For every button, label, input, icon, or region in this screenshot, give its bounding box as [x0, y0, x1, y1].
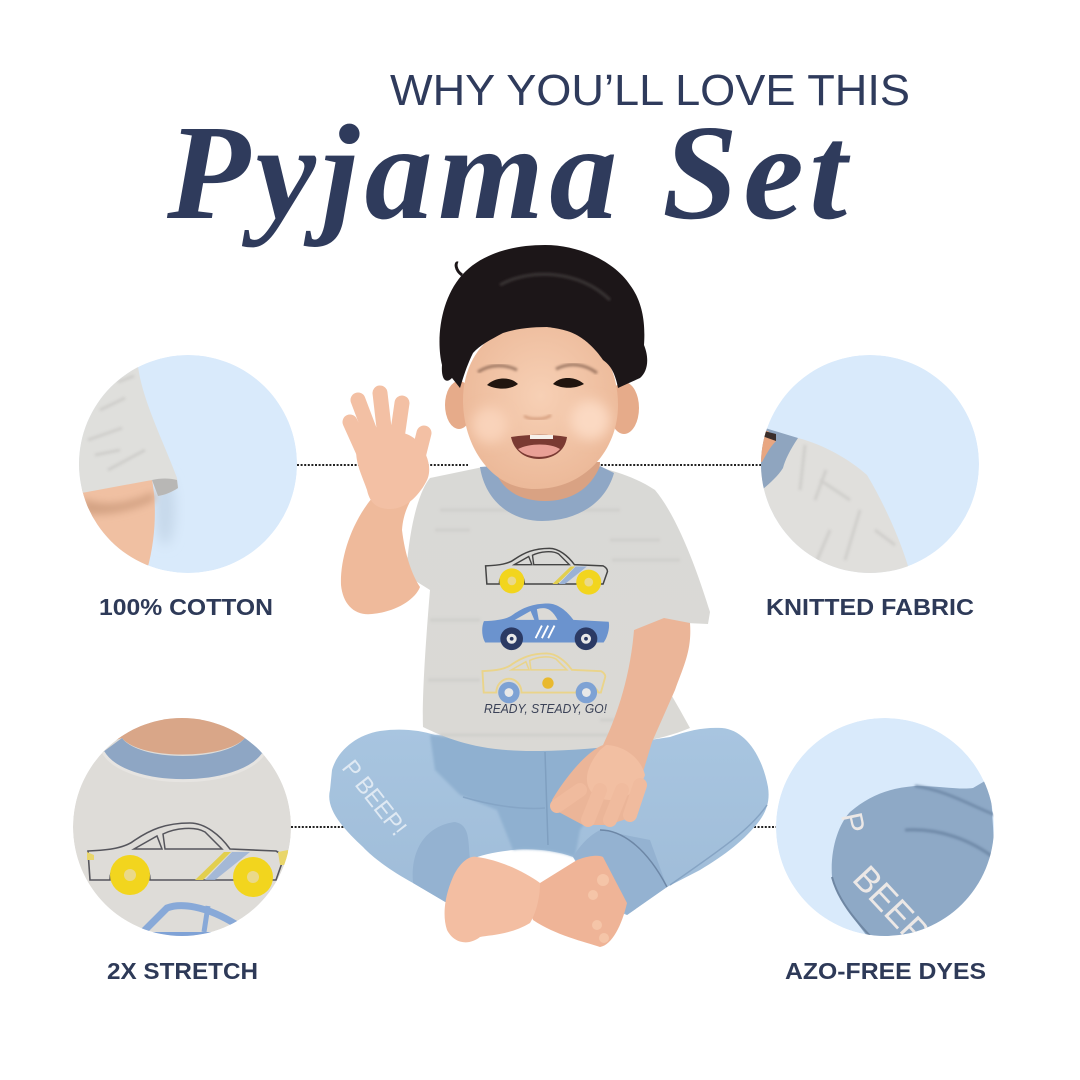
label: knitted fabric: KNITTED FABRIC	[766, 594, 974, 620]
shirt	[406, 462, 710, 751]
neck	[490, 462, 600, 503]
label: 2x stretch: 2X STRETCH	[107, 958, 258, 984]
head	[439, 245, 647, 489]
cheeks	[472, 400, 610, 443]
baby illustration	[329, 245, 769, 947]
car print: outline car	[486, 548, 607, 595]
panel: azo-free dyes detail circle	[776, 718, 1000, 953]
hair	[439, 245, 647, 388]
panel: 2x stretch detail circle	[73, 710, 291, 945]
printed text on leg: P BEEP!	[336, 755, 412, 841]
car print: yellow outline car	[482, 653, 605, 703]
mouth	[511, 435, 567, 459]
eyebrows	[478, 366, 517, 372]
label: azo-free dyes: AZO-FREE DYES	[785, 958, 986, 984]
pants	[329, 728, 769, 915]
feet	[445, 856, 627, 947]
right arm and hand	[552, 618, 690, 825]
nose	[524, 415, 551, 419]
car illustration	[87, 823, 288, 897]
left arm	[341, 498, 420, 614]
heading: why you'll love this: WHY YOU’LL LOVE THIS	[390, 66, 910, 115]
shirt slogan: READY, STEADY, GO!	[484, 702, 607, 716]
eyes	[487, 378, 518, 389]
label: 100% cotton: 100% COTTON	[99, 594, 273, 620]
ears	[445, 381, 473, 429]
collar	[480, 466, 614, 521]
face	[463, 320, 618, 489]
panel: knitted fabric detail circle	[761, 355, 979, 573]
car print: blue car	[482, 603, 609, 650]
panel: azo-free dyes detail circle: BEEP	[845, 857, 938, 953]
printed text on leg: P	[834, 810, 871, 836]
title: pyjama set: Pyjama Set	[166, 98, 851, 248]
waving hand	[350, 393, 429, 509]
panel: 100% cotton detail circle	[70, 355, 297, 580]
dotted connector lines	[291, 465, 776, 827]
second car roof	[143, 906, 237, 932]
